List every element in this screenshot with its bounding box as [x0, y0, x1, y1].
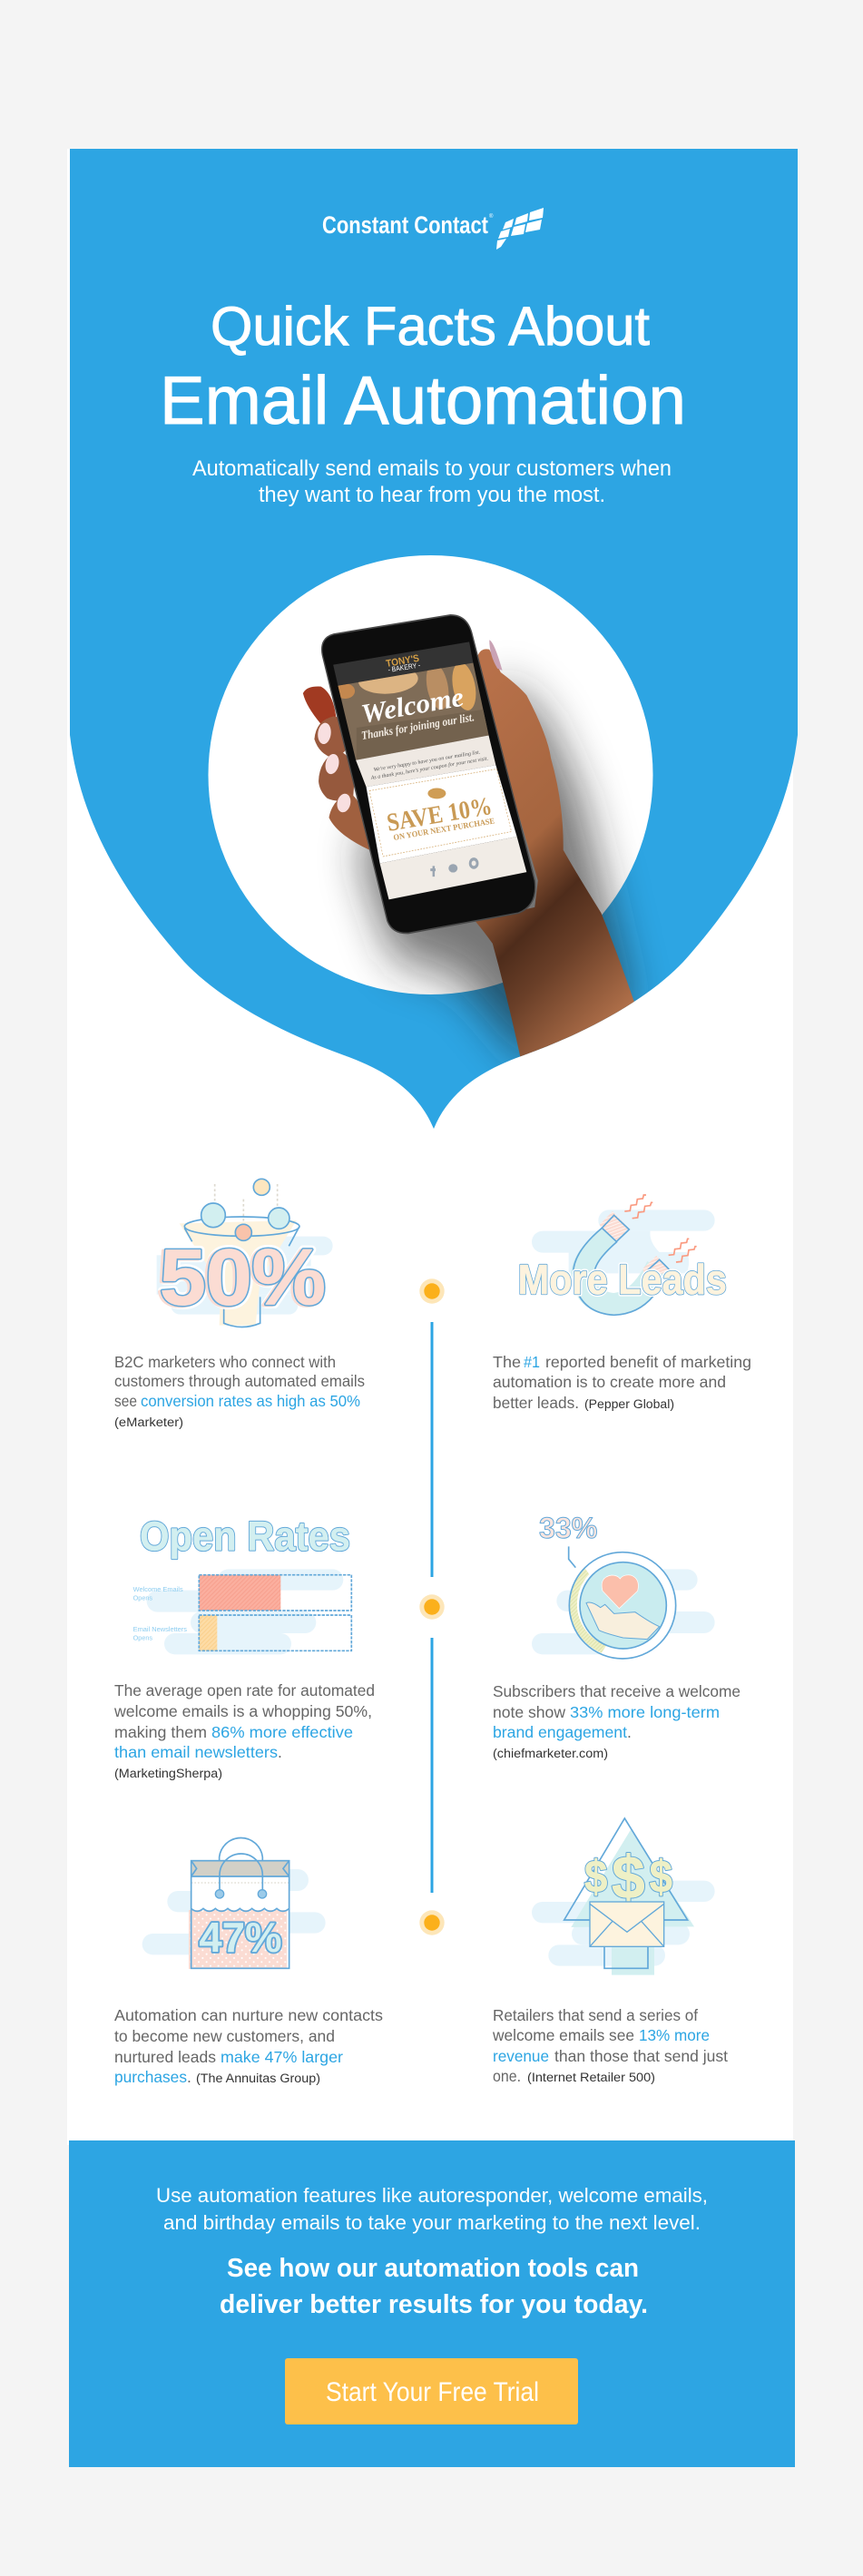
- dollars: $: [612, 1845, 645, 1912]
- text block: larger purchases: to become new customers, and: [114, 2027, 335, 2045]
- text block: brand engagement: (chiefmarketer.com): [493, 1747, 608, 1760]
- text block: conversion rates: [114, 1353, 365, 1429]
- text block: larger purchases: .: [187, 2068, 191, 2086]
- icon: arrow, envelope and dollars: [532, 1818, 715, 1975]
- footer bold heading: See how our automation tools can: [227, 2254, 639, 2283]
- footer bold heading: deliver better results for you today.: [220, 2290, 648, 2319]
- phone and hand shadow: [357, 686, 632, 1056]
- illustration: hand holding phone: [303, 615, 639, 1063]
- title: Email Automation: [160, 362, 686, 438]
- text block: more leads: #1: [524, 1353, 540, 1371]
- panel: blue hero header: [70, 149, 798, 1129]
- icon: funnel with 50%: [157, 1179, 333, 1327]
- footer intro text: and birthday emails to take your marketing to the next level.: [163, 2211, 701, 2234]
- panel: footer call to action: [69, 2140, 795, 2467]
- text block: open rates: The average open rate for automated: [114, 1681, 375, 1699]
- phone body: [322, 615, 535, 934]
- phone screen text: SAVE 10%: [385, 792, 495, 837]
- text block: open rates: making them: [114, 1723, 207, 1741]
- phone screen text: We're very happy to have you on our mailing list.: [373, 749, 481, 773]
- subtitle: they want to hear from you the most.: [259, 483, 605, 507]
- bar labels: Email Newsletters: [133, 1625, 187, 1633]
- text block: brand engagement: 33% more long-term: [570, 1703, 720, 1721]
- text block: larger purchases: nurtured leads: [114, 2048, 216, 2066]
- text block: open rates: 86% more effective: [211, 1723, 353, 1741]
- heart: [602, 1575, 638, 1609]
- chart: open rates bars: [133, 1513, 351, 1654]
- text block: conversion rates: B2C marketers who connect with: [114, 1353, 336, 1371]
- footer intro text: [156, 2184, 708, 2234]
- text block: more revenue: [492, 2006, 728, 2085]
- hand and arm: [473, 649, 639, 1063]
- bar: welcome emails: [199, 1575, 280, 1611]
- thumb nail: [489, 640, 503, 671]
- label: 50%: 50%: [160, 1232, 326, 1321]
- subtitle: Automatically send emails to your customers when: [192, 456, 672, 481]
- phone screen text: Thanks for joining our list.: [360, 710, 476, 742]
- fingers: [303, 686, 369, 850]
- phone screen text: [358, 653, 495, 842]
- dollars: [584, 1845, 672, 1912]
- icon: hand with heart and 33%: [532, 1512, 715, 1660]
- text block: conversion rates: conversion rates as high as 50%: [141, 1392, 360, 1410]
- text block: more revenue: revenue: [493, 2047, 549, 2065]
- text block: open rates: .: [278, 1743, 282, 1761]
- text block: larger purchases: [114, 2006, 383, 2086]
- label: More Leads: More Leads: [518, 1256, 727, 1303]
- text block: brand engagement: [493, 1682, 740, 1760]
- text block: more revenue: (Internet Retailer 500): [527, 2071, 655, 2084]
- text block: more leads: reported benefit of marketing: [545, 1353, 751, 1371]
- text block: larger purchases: (The Annuitas Group): [196, 2072, 320, 2085]
- text block: more revenue: 13% more: [639, 2026, 710, 2044]
- dollars: $: [650, 1851, 672, 1902]
- phone screen text: As a thank you, here's your coupon for your next visit.: [369, 755, 489, 781]
- bar labels: Opens: [133, 1594, 152, 1602]
- phone screen text: TONY'S: [385, 653, 420, 670]
- phone screen text: Welcome: [358, 682, 466, 730]
- phone screen: [333, 642, 526, 899]
- subtitle: [192, 456, 672, 507]
- bar labels: [133, 1585, 187, 1642]
- label: 33%: 33%: [539, 1512, 597, 1544]
- button: start free trial: Start Your Free Trial: [326, 2377, 539, 2407]
- bar labels: Welcome Emails: [133, 1585, 183, 1593]
- label: 50%: 50%: [160, 1232, 326, 1321]
- text block: open rates: [113, 1681, 375, 1780]
- logo: Constant Contact: Constant Contact: [322, 211, 488, 239]
- button: start free trial: [285, 2358, 578, 2424]
- envelope: [590, 1902, 664, 1946]
- text block: brand engagement: note show: [493, 1703, 565, 1721]
- panel: white body: [67, 149, 793, 2145]
- footer bold heading: [220, 2254, 648, 2319]
- logo: Constant Contact: ®: [489, 213, 494, 220]
- text block: open rates: welcome emails is a whopping 50%,: [113, 1702, 372, 1720]
- text block: more revenue: than those that send just: [554, 2047, 728, 2065]
- phone screen text: ON YOUR NEXT PURCHASE: [393, 816, 495, 842]
- phone screen text: - BAKERY -: [387, 661, 421, 674]
- heading: Open Rates: Open Rates: [140, 1513, 350, 1559]
- label: More Leads: More Leads: [518, 1256, 727, 1303]
- text block: more revenue: welcome emails see: [492, 2026, 634, 2044]
- text block: larger purchases: purchases: [114, 2068, 187, 2086]
- label: 47%: 47%: [199, 1914, 282, 1961]
- white circle behind phone: [209, 555, 653, 994]
- text block: more leads: automation is to create more and: [493, 1373, 726, 1391]
- text block: more leads: The: [493, 1353, 521, 1371]
- bar: email newsletters: [199, 1615, 217, 1650]
- footer intro text: Use automation features like autoresponder, welcome emails,: [156, 2184, 708, 2207]
- label: 50%: 50%: [157, 1233, 323, 1322]
- text block: conversion rates: (eMarketer): [114, 1415, 183, 1429]
- text block: more leads: [493, 1353, 751, 1412]
- label: 47%: 47%: [199, 1914, 282, 1961]
- title: Quick Facts About: [211, 296, 650, 357]
- text block: more leads: better leads.: [493, 1394, 579, 1412]
- text block: conversion rates: see: [114, 1392, 137, 1410]
- text block: more revenue: Retailers that send a series of: [493, 2006, 698, 2024]
- icon: shopping bag 47%: [142, 1837, 326, 1969]
- open hand: [586, 1602, 660, 1640]
- text block: larger purchases: make 47% larger: [221, 2048, 343, 2066]
- text block: open rates: (MarketingSherpa): [114, 1767, 222, 1780]
- text block: conversion rates: customers through automated emails: [114, 1372, 365, 1390]
- title: [160, 296, 686, 438]
- heading: Open Rates: Open Rates: [140, 1513, 350, 1559]
- label: More Leads: More Leads: [518, 1256, 727, 1303]
- text block: brand engagement: brand engagement: [493, 1723, 627, 1741]
- timeline: [419, 1278, 445, 1935]
- dollars: $: [584, 1851, 607, 1902]
- text block: more revenue: one.: [493, 2067, 521, 2085]
- bar labels: Opens: [133, 1634, 152, 1642]
- dollars: $: [650, 1851, 672, 1902]
- dollars: $: [584, 1851, 607, 1902]
- text block: open rates: than email newsletters: [114, 1743, 278, 1761]
- text block: brand engagement: .: [627, 1723, 632, 1741]
- icon: magnet with More Leads: [518, 1195, 727, 1315]
- logo: Constant Contact: [322, 208, 544, 250]
- text block: more leads: (Pepper Global): [584, 1397, 674, 1411]
- label: 50%: 50%: [160, 1232, 326, 1321]
- text block: larger purchases: Automation can nurture new contacts: [114, 2006, 383, 2024]
- text block: brand engagement: Subscribers that receive a welcome: [493, 1682, 740, 1700]
- dollars: $: [612, 1845, 645, 1912]
